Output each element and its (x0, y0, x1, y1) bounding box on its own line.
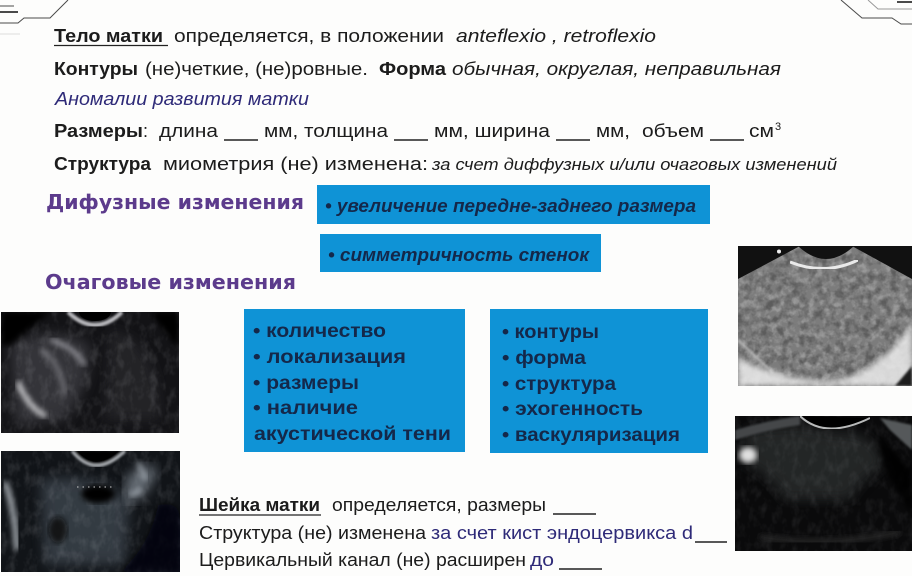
line: dimensions: : (143, 121, 148, 141)
line: contours and form: обычная, округлая, неправильная (452, 59, 781, 79)
panel: focal lesion character list: • васкуляризация (502, 425, 680, 446)
panel: focal lesion count list: • наличие (253, 398, 358, 419)
decoration: top-left circuit lines (0, 0, 68, 34)
line: dimensions: длина (159, 121, 219, 141)
line: cervix: определяется, размеры (332, 495, 546, 515)
line: cervix structure (199, 523, 727, 543)
line: dimensions: см (749, 121, 774, 141)
heading: diffuse changes: Дифузные изменения (46, 190, 304, 214)
line: myometrium structure: за счет диффузных и/или очаговых изменений (431, 155, 838, 174)
line: dimensions: мм, толщина (264, 121, 389, 141)
line: body of uterus: anteflexio , retroflexio (456, 26, 656, 46)
image: ultrasound right top (738, 246, 912, 386)
panel: focal lesion count list (244, 309, 465, 452)
image: ultrasound right bottom (735, 416, 912, 551)
line: dimensions: Размеры (54, 121, 143, 141)
line: cervix structure: за счет кист эндоцервикса d (431, 523, 693, 543)
callout: wall symmetry (320, 234, 601, 272)
callout: anteroposterior size: • увеличение передне-заднего размера (325, 196, 696, 216)
line: body of uterus: определяется, в положении (174, 26, 444, 46)
line: body of uterus (54, 26, 656, 46)
callout: anteroposterior size (317, 185, 710, 224)
panel: focal lesion count list: акустической тени (254, 424, 451, 445)
text block: cervix description (199, 495, 727, 570)
line: contours and form (54, 59, 781, 79)
line: dimensions: объем (642, 121, 704, 141)
line: cervix structure: Структура (не) изменена (199, 523, 427, 543)
panel: focal lesion character list: • эхогенность (502, 399, 643, 420)
line: dimensions (54, 121, 781, 141)
line: developmental anomalies: Аномалии развития матки (54, 89, 309, 109)
panel: focal lesion count list: • размеры (253, 373, 359, 394)
text block: uterus body description (54, 26, 838, 174)
line: cervical canal: до (530, 550, 554, 570)
line: cervical canal: Цервикальный канал (не) расширен (199, 550, 526, 570)
panel: focal lesion character list (490, 309, 708, 453)
line: myometrium structure: Структура (54, 154, 152, 174)
callout: wall symmetry: • симметричность стенок (328, 245, 590, 265)
line: dimensions: мм, ширина (434, 121, 551, 141)
image: ultrasound left top (1, 303, 179, 433)
line: contours and form: Форма (379, 59, 447, 79)
line: myometrium structure (54, 154, 838, 174)
heading: focal changes: Очаговые изменения (45, 270, 296, 294)
line: dimensions: мм, (596, 121, 630, 141)
line: body of uterus: Тело матки (54, 26, 163, 46)
image: ultrasound left bottom (1, 451, 180, 572)
line: myometrium structure: миометрия (не) изменена: (163, 154, 428, 174)
panel: focal lesion character list: • контуры (502, 322, 599, 343)
line: dimensions: 3 (775, 121, 781, 133)
line: contours and form: (не)четкие, (не)ровные. (145, 59, 368, 79)
decoration: top-right circuit lines (841, 0, 912, 24)
line: cervix (199, 495, 596, 515)
line: cervix: Шейка матки (199, 495, 320, 515)
panel: focal lesion count list: • локализация (253, 347, 406, 368)
line: contours and form: Контуры (54, 59, 138, 79)
panel: focal lesion count list: • количество (253, 321, 386, 342)
panel: focal lesion character list: • структура (502, 374, 616, 395)
panel: focal lesion character list: • форма (502, 348, 586, 369)
